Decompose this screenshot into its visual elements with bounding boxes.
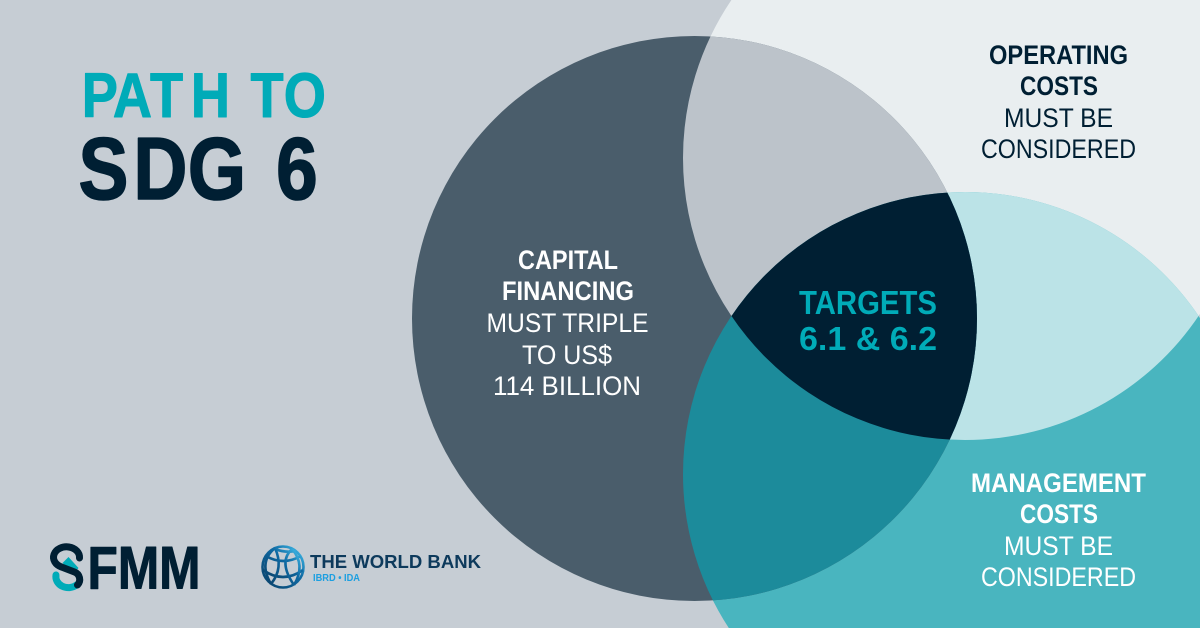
label: management costs: CONSIDERED [981, 562, 1136, 592]
label: operating costs: OPERATING [989, 40, 1128, 70]
venn diagram [412, 0, 1200, 628]
label: capital financing: CAPITAL [518, 245, 618, 275]
label: targets: TARGETS [799, 284, 937, 321]
overlap: capital and operating [683, 36, 948, 316]
label: operating costs: MUST BE [1004, 103, 1113, 133]
label: management costs: MUST BE [1004, 531, 1113, 561]
overlap: targets centre [732, 192, 977, 440]
label: capital financing [486, 245, 648, 401]
label: targets: 6.1 & 6.2 [799, 320, 937, 357]
logo: the world bank: THE WORLD BANK [310, 551, 482, 572]
label: operating costs: COSTS [1020, 71, 1098, 101]
logo: sfmm: FMM [88, 534, 200, 602]
label: management costs [971, 468, 1146, 592]
title line: sdg 6: SDG 6 [79, 120, 318, 218]
label: capital financing: MUST TRIPLE [486, 308, 648, 338]
label: management costs: MANAGEMENT [971, 468, 1146, 498]
circle: operating costs [683, 0, 1200, 440]
logo: the world bank [262, 546, 482, 588]
label: management costs: COSTS [1020, 499, 1098, 529]
label: operating costs [981, 40, 1136, 164]
title [79, 61, 326, 218]
icon: sfmm droplet s [54, 547, 80, 588]
label: capital financing: TO US$ [522, 340, 612, 370]
overlap: operating and management [948, 192, 1198, 440]
overlap: capital and management [683, 192, 977, 600]
circle: management costs [683, 192, 1200, 628]
title line: path to: PATH TO [82, 61, 326, 131]
label: capital financing: FINANCING [502, 276, 634, 306]
logo: the world bank: IBRD • IDA [313, 573, 360, 584]
icon: globe [262, 546, 304, 588]
label: capital financing: 114 BILLION [493, 371, 641, 401]
label: targets [799, 284, 937, 357]
circle: capital financing [412, 36, 977, 601]
logo: sfmm [54, 534, 201, 602]
label: operating costs: CONSIDERED [981, 134, 1136, 164]
